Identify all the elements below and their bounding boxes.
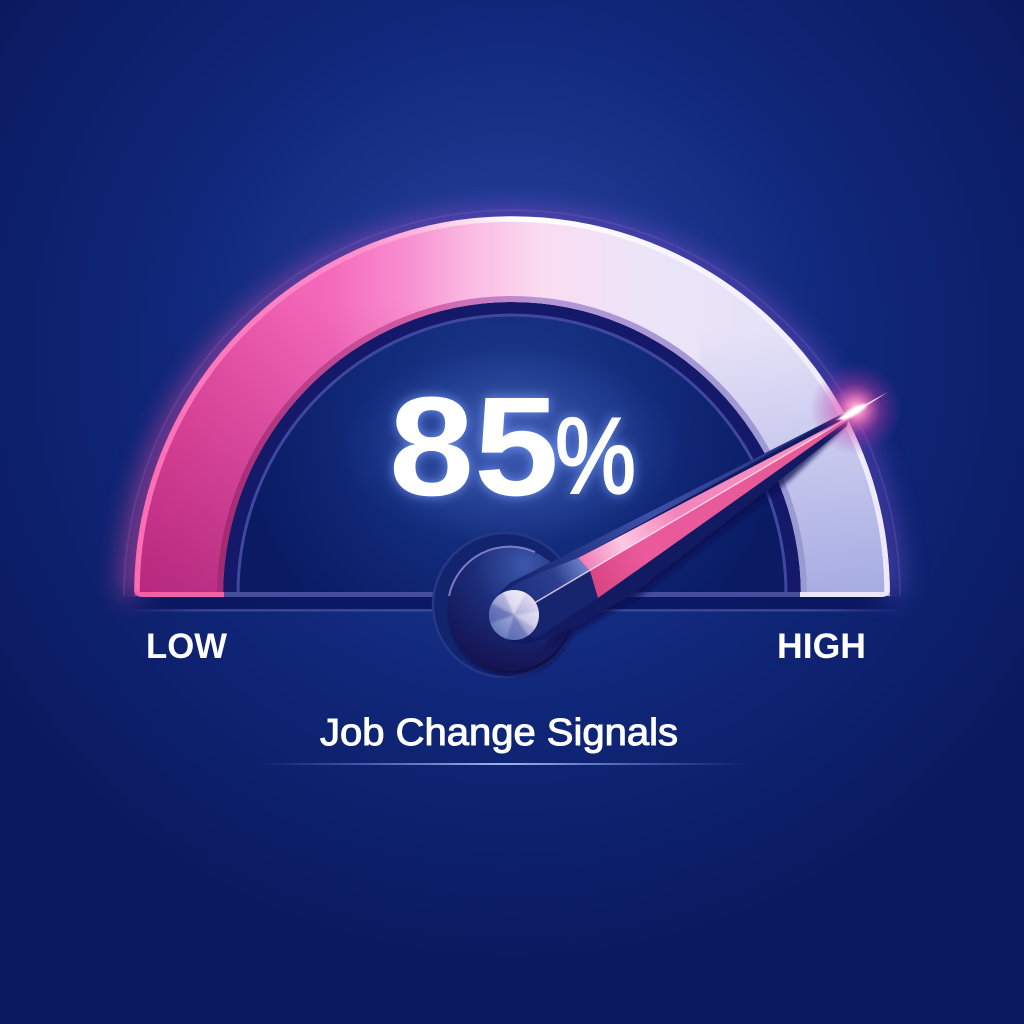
lower base line bbox=[130, 609, 900, 612]
value: 85%: 85 bbox=[389, 367, 559, 525]
cap disc bbox=[489, 590, 539, 640]
value: 85% bbox=[389, 367, 636, 525]
dark base band bbox=[120, 597, 905, 610]
value: 85%: % bbox=[555, 395, 636, 516]
label: HIGH: HIGH bbox=[777, 627, 866, 666]
hub bbox=[433, 533, 577, 677]
cap brushed sheen bbox=[489, 590, 539, 640]
arc right foot bbox=[800, 588, 890, 597]
needle bbox=[485, 363, 902, 650]
caption: Job Change Signals bbox=[320, 712, 678, 754]
needle ridge highlight bbox=[514, 407, 867, 615]
outer halo ring bbox=[124, 210, 900, 596]
inner ring line bbox=[238, 315, 786, 594]
hub disc bbox=[448, 547, 572, 671]
hub rim highlight bbox=[449, 547, 535, 596]
needle upper rim bbox=[501, 410, 850, 615]
arc inner bevel bbox=[223, 302, 801, 596]
flare at needle tip bbox=[810, 363, 902, 455]
hub outer ring bbox=[433, 533, 577, 677]
flare streak bbox=[836, 392, 888, 420]
inner dark band bbox=[230, 309, 794, 596]
needle pink upper face bbox=[578, 407, 867, 571]
needle base lower face bbox=[514, 571, 598, 637]
flare core bbox=[838, 401, 868, 423]
gauge arc band bbox=[134, 219, 890, 597]
gauge bbox=[120, 210, 905, 677]
caption rule bbox=[258, 763, 748, 765]
needle pink lower face bbox=[590, 407, 867, 598]
needle cap bbox=[489, 590, 539, 640]
needle navy body bbox=[492, 410, 850, 644]
arc outer edge highlight bbox=[137, 219, 887, 592]
percentage glow bbox=[342, 347, 682, 547]
flare halo bbox=[810, 363, 902, 455]
label: LOW: LOW bbox=[146, 627, 227, 666]
arc shading left bbox=[134, 346, 346, 596]
arc shading right bbox=[701, 364, 890, 596]
arc fill bbox=[134, 220, 890, 596]
arc left foot bbox=[134, 588, 224, 597]
needle shadow bbox=[545, 424, 848, 650]
gauge inner face bbox=[223, 302, 801, 596]
needle base upper face bbox=[504, 558, 590, 615]
upper base line bbox=[224, 592, 800, 597]
hub shadow bbox=[450, 551, 574, 675]
arc glow bbox=[134, 220, 890, 596]
